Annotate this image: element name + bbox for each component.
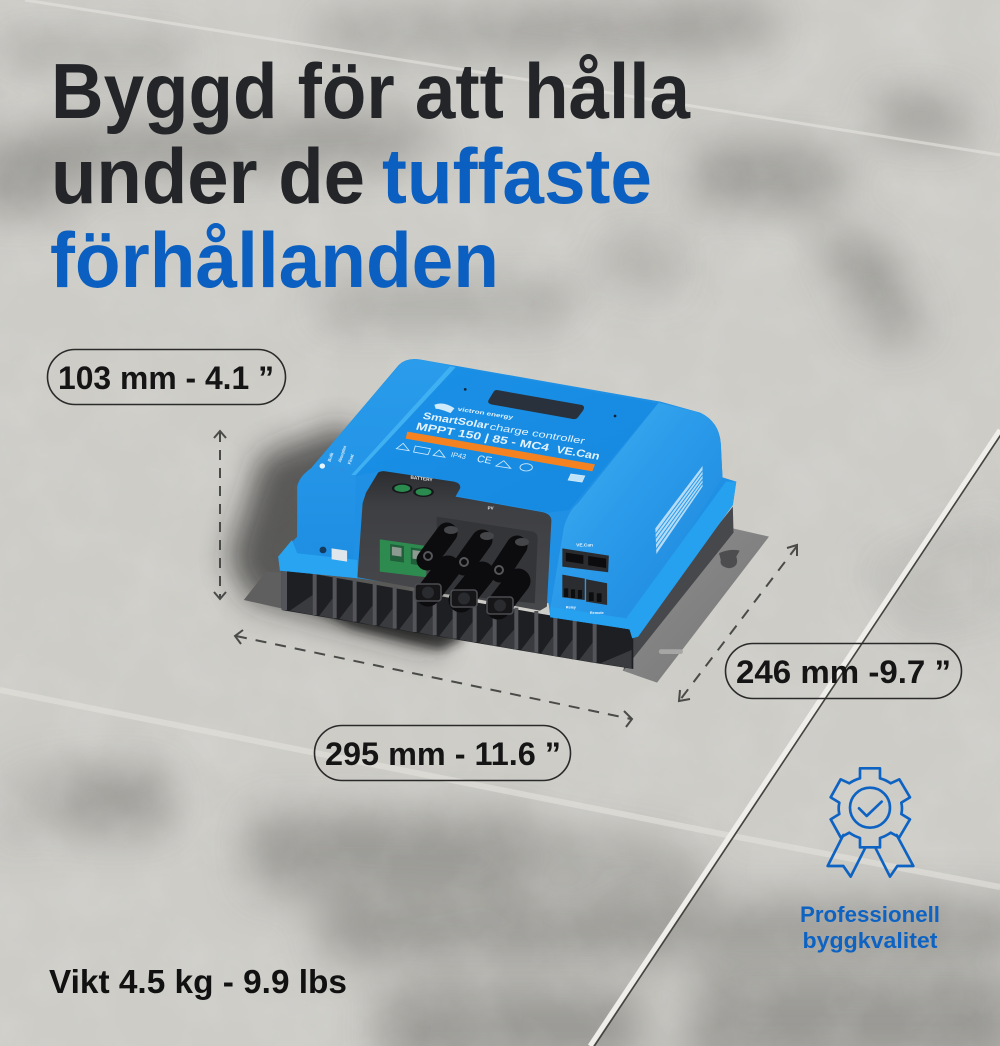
orange band [406, 432, 595, 471]
title: tuffaste [382, 132, 652, 220]
status LEDs: Absorption [337, 445, 347, 463]
pill: depth [726, 644, 962, 698]
title: Byggd för att hålla [51, 47, 691, 135]
pill: height [48, 350, 286, 404]
screw dots [464, 388, 616, 417]
body parts [278, 359, 736, 638]
badge label: byggkvalitet [802, 928, 938, 953]
pill: height: 103 mm - 4.1 ” [58, 360, 274, 396]
device shadow on floor [228, 425, 462, 650]
title: under de [51, 132, 365, 220]
product label text: CE [475, 454, 493, 467]
product: solar charge controller [244, 359, 769, 683]
dimension arrow: length [235, 630, 632, 727]
VE.Can ports and terminal blocks: VE.Can [576, 543, 593, 549]
badge label: Professionell [800, 902, 940, 927]
product label text [414, 407, 601, 467]
pill: depth: 246 mm -9.7 ” [736, 654, 951, 690]
pill: length: 295 mm - 11.6 ” [325, 736, 561, 772]
product label text: charge controller [488, 422, 587, 447]
stripe label on side [655, 466, 703, 554]
dimension arrow: height [214, 431, 226, 599]
badge label [800, 902, 940, 953]
heatsink fins [282, 568, 633, 669]
battery and PV terminal panel: BATTERY [410, 475, 433, 484]
status LEDs: Float [347, 453, 355, 465]
dimension arrow: depth [679, 545, 797, 701]
right shoulder [550, 403, 722, 622]
VE.Can ports and terminal blocks [562, 543, 609, 615]
title [50, 47, 691, 304]
VE.Can ports and terminal blocks: Relay [566, 605, 577, 609]
icon: quality gear rosette [828, 768, 913, 877]
safety icons [396, 404, 585, 482]
status LEDs: Bulk [327, 451, 335, 462]
VE.Can ports and terminal blocks: Remote [590, 611, 604, 615]
battery and PV terminal panel: PV [488, 505, 494, 510]
weight text: Vikt 4.5 kg - 9.9 lbs [49, 963, 347, 1000]
mounting plate [244, 507, 769, 683]
product label text: victron energy [457, 407, 515, 421]
top panel [356, 367, 658, 513]
USB port and LED [320, 547, 347, 562]
battery and PV terminal panel [357, 471, 551, 611]
product label text: SmartSolar [421, 411, 490, 432]
product label text: MPPT 150 | 85 - MC4 [414, 421, 551, 454]
product label text: VE.Can [555, 444, 601, 463]
title: förhållanden [50, 216, 499, 304]
pill: length [314, 726, 570, 780]
product label text: IP43 [450, 451, 467, 461]
status LEDs [320, 445, 355, 471]
left shoulder [297, 359, 456, 578]
blue housing [278, 359, 736, 638]
MC4 solar connectors [415, 526, 529, 614]
lower flange [278, 540, 357, 578]
display cover [488, 390, 584, 419]
